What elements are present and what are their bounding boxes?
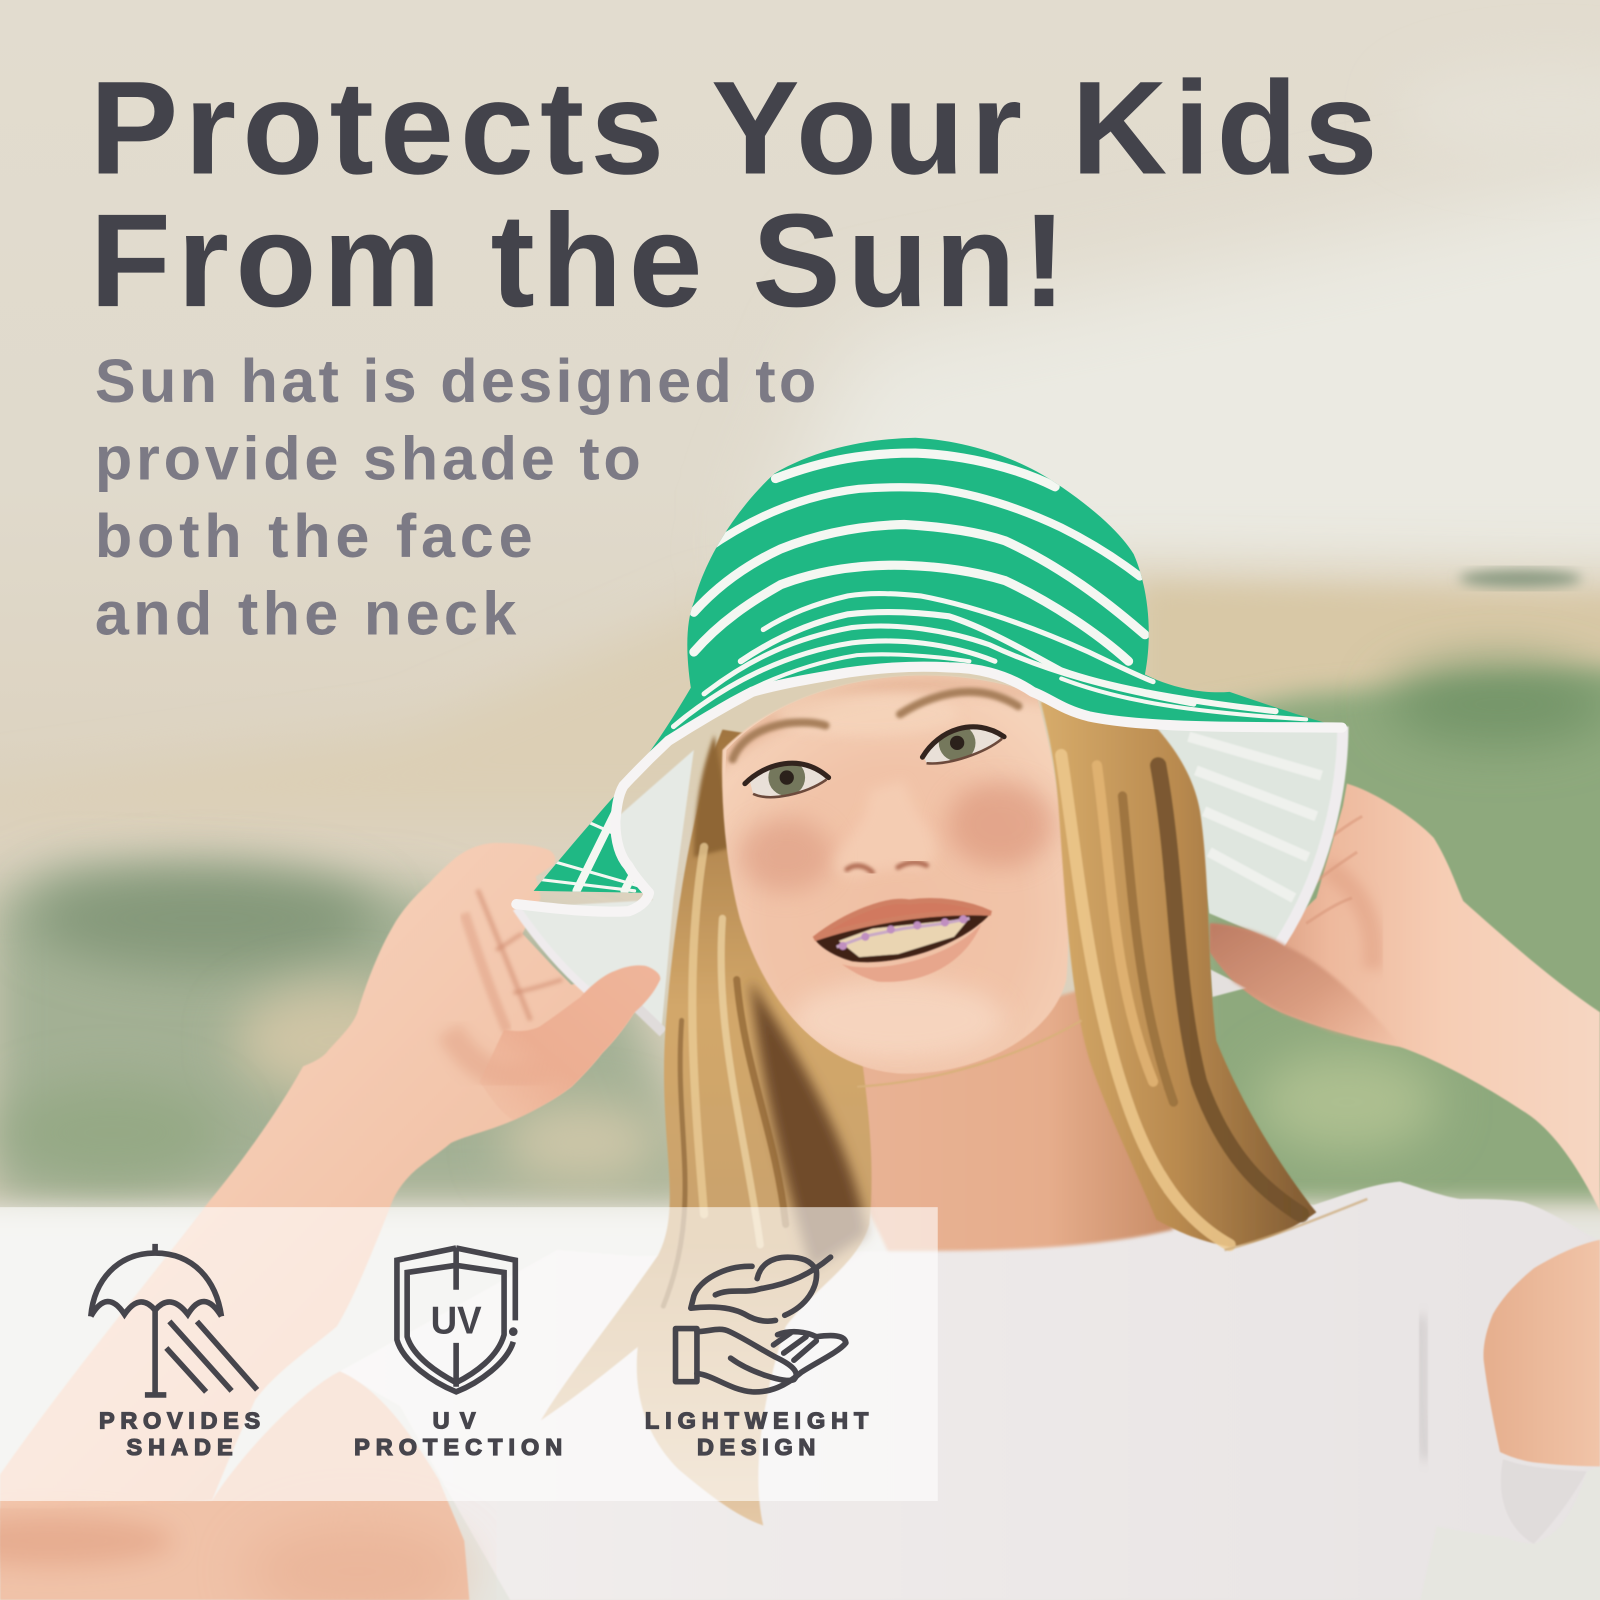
feature label: lightweight design: LIGHTWEIGHT	[645, 1408, 869, 1434]
eyebrows	[733, 692, 1018, 759]
mouth and braces	[814, 901, 991, 982]
title: Protects Your Kids	[90, 54, 1378, 202]
title	[90, 54, 1378, 335]
girl: neck	[857, 990, 1173, 1251]
girl: lower right arm	[1483, 1240, 1600, 1466]
icon: umbrella with sun rays	[91, 1244, 257, 1395]
girl: right arm and hand	[1210, 784, 1600, 1211]
girl: hair right side	[857, 702, 1367, 1250]
subtitle text block: provide shade to	[95, 425, 641, 493]
feature label: lightweight design	[645, 1408, 869, 1460]
translucent icon strip	[0, 1207, 938, 1501]
feature label: UV protection: UV	[433, 1408, 476, 1434]
icon: UV shield	[397, 1248, 515, 1392]
green striped hat	[516, 438, 1342, 912]
girl: right thumb	[1210, 923, 1403, 1049]
girl: face	[714, 675, 1068, 1074]
feature label: lightweight design: DESIGN	[697, 1434, 815, 1460]
girl: left forearm and hand	[0, 843, 660, 1520]
subtitle text block: both the face	[95, 502, 533, 570]
icon: UV shield: UV	[431, 1300, 482, 1343]
feature label: provides shade: SHADE	[127, 1434, 233, 1460]
right eye	[922, 724, 1004, 763]
subtitle text block: Sun hat is designed to	[95, 347, 816, 415]
girl: left upper arm	[0, 1371, 469, 1600]
girl: left thumb	[480, 965, 660, 1120]
girl: shirt	[340, 1173, 1600, 1600]
left eye	[745, 759, 829, 798]
feature label: UV protection: PROTECTION	[354, 1434, 562, 1460]
girl: hair behind left	[541, 730, 872, 1526]
subtitle text block: and the neck	[95, 580, 517, 648]
feature label: provides shade: PROVIDES	[99, 1408, 260, 1434]
title: From the Sun!	[90, 187, 1066, 335]
feature label: provides shade	[99, 1408, 260, 1460]
hat underside: right side	[1143, 714, 1343, 997]
feature label: UV protection	[354, 1408, 562, 1460]
hat underside: left side	[516, 750, 694, 1033]
icon: leaf over open hand	[676, 1257, 846, 1392]
nose	[834, 781, 936, 877]
subtitle text block	[95, 347, 816, 648]
hat brim edge	[516, 667, 1342, 912]
